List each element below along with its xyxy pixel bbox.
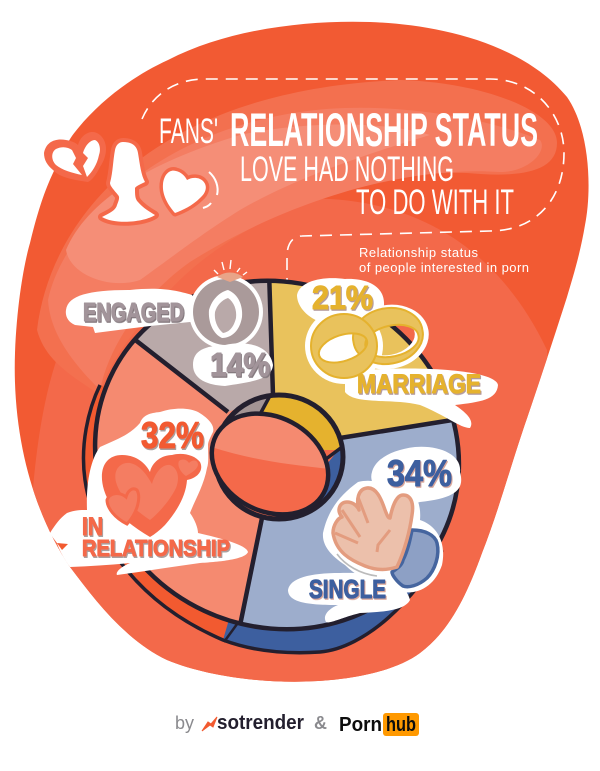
label: engaged xyxy=(66,260,273,386)
icon group: broken heart, profile, heart xyxy=(44,132,218,222)
label: marriage xyxy=(297,278,498,428)
icon: hearts xyxy=(102,454,201,537)
chart caption: of people interested in porn xyxy=(359,260,529,275)
label text: MARRIAGE xyxy=(357,369,481,399)
pie center hub xyxy=(210,392,346,522)
chart caption: Relationship status xyxy=(359,245,478,260)
logo: sotrender mark xyxy=(202,717,217,731)
logo: sotrender: sotrender xyxy=(217,712,304,734)
value: 34%: 34% xyxy=(387,453,452,494)
label: single xyxy=(288,447,461,622)
white brush shape xyxy=(345,368,498,428)
label: in relationship xyxy=(50,409,248,575)
icon: wedding rings xyxy=(311,308,423,378)
slice: engaged xyxy=(138,283,271,412)
white brush shape xyxy=(66,289,210,333)
title xyxy=(159,103,538,222)
label text xyxy=(82,513,230,561)
icon: ring with diamond xyxy=(189,260,263,349)
value: 32%: 32% xyxy=(141,415,204,456)
label text: IN xyxy=(82,513,103,541)
white halo behind rings xyxy=(305,308,383,384)
white percent blob xyxy=(193,343,273,386)
text: by: by xyxy=(175,713,194,733)
white hand halo xyxy=(323,481,443,593)
title line: fans: FANS' xyxy=(159,112,218,151)
chart caption xyxy=(359,245,529,275)
icon: broken heart xyxy=(44,132,106,182)
white halo second ring xyxy=(350,306,426,368)
pie top surface xyxy=(92,278,462,632)
small orange notch xyxy=(57,543,68,550)
logo: hub box: hub xyxy=(386,714,416,736)
slice: single xyxy=(243,422,457,627)
white percent blob xyxy=(371,447,461,504)
slice: marriage xyxy=(272,283,448,436)
label text: SINGLE xyxy=(309,574,386,604)
logo: porn: Porn xyxy=(339,714,382,736)
label text: ENGAGED xyxy=(83,297,184,327)
icon: hand with cuff xyxy=(333,488,438,587)
value: 14%: 14% xyxy=(210,346,270,383)
icon: profile silhouette xyxy=(102,142,155,222)
white brush shape xyxy=(50,409,248,575)
pie chart xyxy=(82,278,462,654)
label text: RELATIONSHIP xyxy=(82,535,230,561)
white percent blob xyxy=(297,278,384,323)
icon: heart xyxy=(163,171,218,213)
dashed callout outline xyxy=(142,79,564,284)
text: ampersand: & xyxy=(314,713,327,733)
pie side: relationship and single depth xyxy=(83,385,442,653)
value: 21%: 21% xyxy=(312,279,373,316)
subtitle line 1: LOVE HAD NOTHING xyxy=(240,150,454,189)
subtitle line 2: TO DO WITH IT xyxy=(356,183,514,222)
white brush shape xyxy=(288,573,410,622)
footer credits xyxy=(175,712,419,736)
